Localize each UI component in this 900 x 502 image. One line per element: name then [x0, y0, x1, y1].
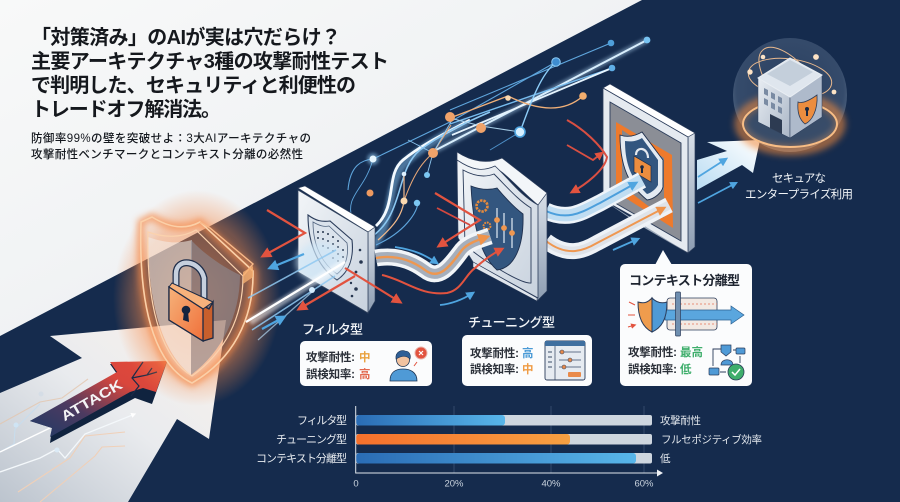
- filter shield with perforations: [308, 215, 352, 280]
- card: filter type: [300, 341, 432, 386]
- background light diagonal area: [0, 0, 642, 336]
- flow ribbons wall 2 to wall 3: [546, 180, 669, 251]
- card: tuning type: 高: [522, 346, 534, 360]
- heading: [31, 25, 389, 121]
- wall 2: tuning: [457, 152, 547, 301]
- wall 3 shield with lock: [620, 132, 663, 200]
- icon: secure enterprise building: [733, 37, 847, 152]
- row labels: コンテキスト分離型: [256, 451, 347, 465]
- circuit lines on attack arrow: [0, 379, 135, 502]
- card: tuning type: 中: [522, 362, 534, 376]
- shield glow: [113, 190, 281, 406]
- axis ticks: 40%: [541, 478, 561, 490]
- big white attack arrow: [0, 320, 226, 502]
- card: tuning type: [462, 335, 592, 386]
- heading: 「対策済み」のAIが実は穴だらけ？: [31, 25, 341, 49]
- label: secure enterprise use: [745, 172, 853, 201]
- subtitle: 防御率99%の壁を突破せよ：3大AIアーキテクチャの: [31, 131, 311, 145]
- card: tuning type: 誤検知率:: [470, 362, 519, 376]
- card: context separation type: 低: [680, 362, 692, 376]
- label: secure enterprise use: セキュアな: [772, 172, 826, 185]
- card title: コンテキスト分離型: [629, 273, 740, 288]
- card: context separation type: [620, 250, 752, 386]
- subtitle: [31, 131, 311, 161]
- attack arrow ribbon: [30, 361, 167, 443]
- heading: で判明した、セキュリティと利便性の: [31, 74, 356, 97]
- bar tracks: [356, 415, 652, 464]
- row labels: チューニング型: [276, 432, 347, 446]
- icon: workflow with check: [709, 345, 745, 380]
- output arrow: [697, 140, 760, 203]
- bar fills: [356, 415, 636, 464]
- heading: トレードオフ解消法。: [31, 98, 221, 121]
- card: filter type: 高: [359, 367, 370, 381]
- card: context separation type: 最高: [680, 345, 703, 359]
- axis ticks: 20%: [444, 478, 464, 490]
- diagram: separated flow: [628, 292, 744, 336]
- card: context separation type: 誤検知率:: [628, 362, 677, 376]
- gears and sliders: [476, 200, 515, 248]
- reflected attack arrows: [262, 120, 638, 329]
- icon: frustrated user: [390, 347, 427, 381]
- axis ticks: 60%: [634, 478, 654, 490]
- axis ticks: [353, 478, 654, 490]
- network nodes: [366, 37, 650, 206]
- row labels: [256, 413, 347, 465]
- label: filter type: フィルタ型: [302, 322, 363, 337]
- main shield with padlock: [141, 217, 253, 383]
- heading: 主要アーキテクチャ3種の攻撃耐性テスト: [31, 50, 389, 73]
- card: tuning type: 攻撃耐性:: [470, 346, 519, 360]
- wall 1: filter: [298, 186, 375, 313]
- series labels: 低: [660, 453, 671, 465]
- series labels: フルセポジティブ効率: [661, 433, 762, 446]
- card: filter type: 攻撃耐性:: [306, 350, 355, 364]
- series labels: 攻撃耐性: [660, 414, 701, 427]
- series labels: [660, 414, 762, 465]
- padlock: [169, 263, 213, 341]
- wall 3: context separation: [603, 84, 695, 253]
- label: tuning type: チューニング型: [468, 315, 555, 330]
- card: filter type: 誤検知率:: [306, 367, 355, 381]
- network data streams: [348, 37, 650, 255]
- row labels: フィルタ型: [297, 413, 347, 427]
- light beams from shield through filter wall: [246, 242, 345, 340]
- card: context separation type: 攻撃耐性:: [628, 345, 677, 359]
- label: secure enterprise use: エンタープライズ利用: [745, 187, 853, 201]
- flow ribbon wall 1 to wall 2: [376, 236, 502, 305]
- attack label: ATTACK: [58, 376, 125, 424]
- icon: settings window: [545, 341, 585, 380]
- card: filter type: 中: [359, 350, 370, 364]
- bar chart: [256, 406, 762, 490]
- subtitle: 攻撃耐性ベンチマークとコンテキスト分離の必然性: [31, 147, 303, 161]
- axis ticks: 0: [353, 478, 359, 490]
